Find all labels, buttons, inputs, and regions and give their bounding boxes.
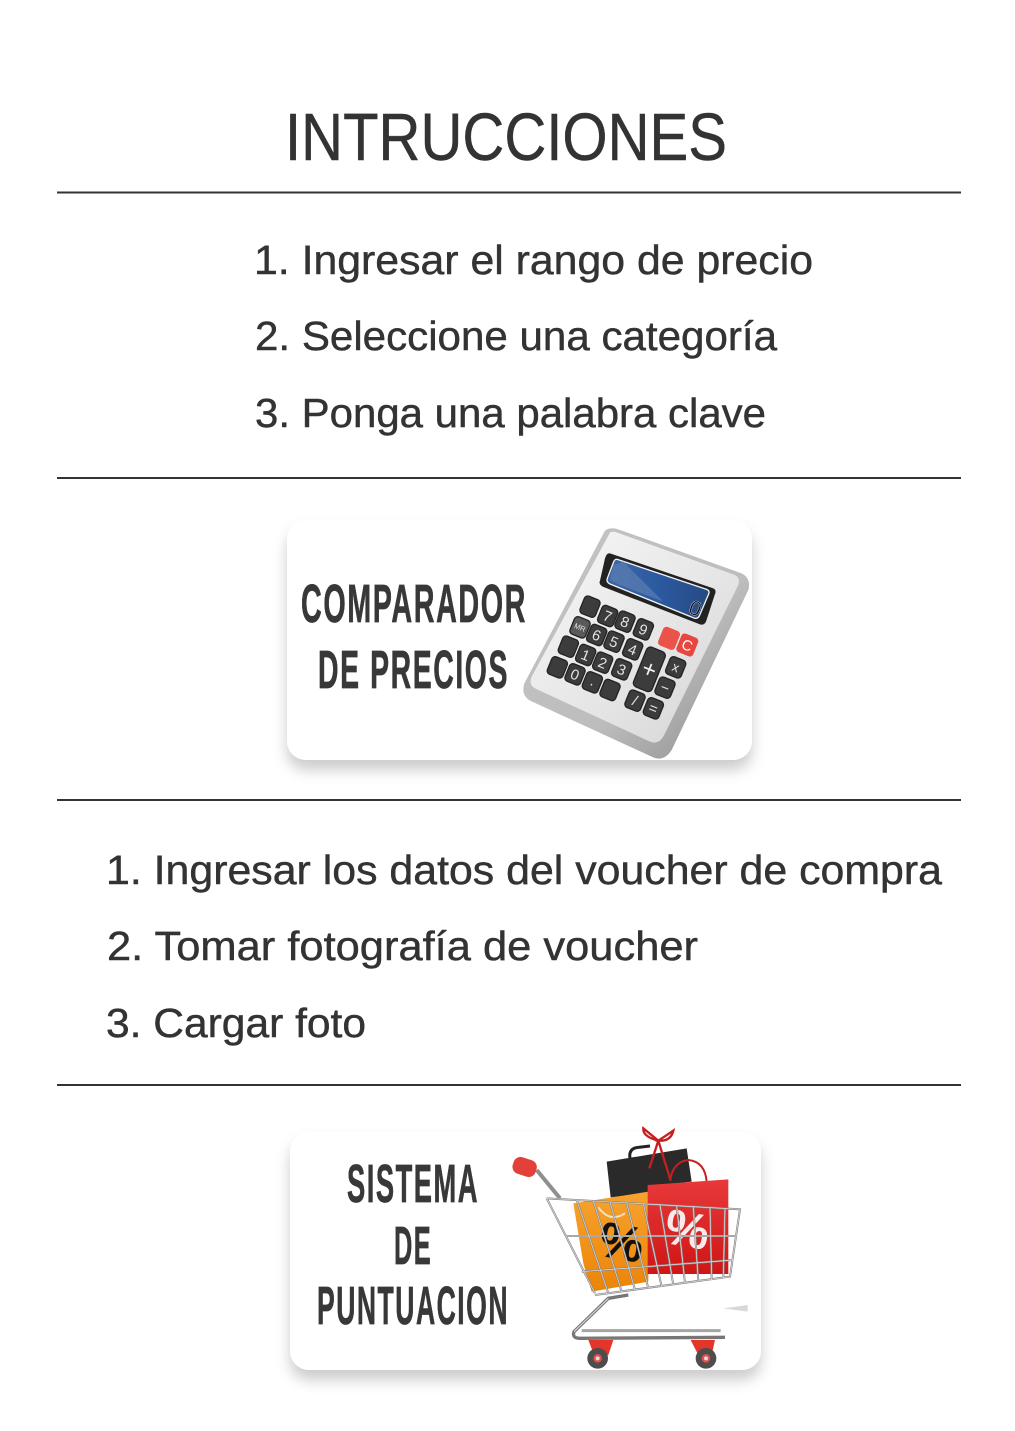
step 2: 2. Tomar fotografía de voucher: [107, 923, 698, 969]
panel: comparador de precios: [287, 520, 752, 760]
icon: calculator: 1: [578, 647, 592, 665]
heading: sistema de puntuacion: SISTEMA: [347, 1154, 479, 1214]
price comparator instructions: [254, 237, 813, 436]
step 1: 1. Ingresar el rango de precio: [254, 237, 813, 283]
icon: shopping cart: %: [595, 1211, 648, 1274]
icon: calculator: MR: [573, 621, 587, 634]
heading: comparador de precios: [301, 574, 527, 700]
icon: calculator: 9: [636, 622, 650, 640]
icon: calculator: x: [670, 659, 682, 676]
heading: comparador de precios: COMPARADOR: [301, 574, 527, 634]
icon: calculator: C: [679, 637, 695, 656]
step 3: 3. Cargar foto: [106, 1000, 366, 1046]
icon: calculator: 4: [625, 642, 639, 660]
icon: calculator: 2: [595, 655, 609, 673]
icon: calculator: =: [646, 700, 660, 718]
heading: comparador de precios: DE PRECIOS: [318, 640, 509, 700]
icon: shopping cart: [511, 1128, 748, 1369]
icon: calculator: 0: [685, 596, 705, 622]
icon: calculator: .: [588, 674, 597, 690]
icon: calculator: +: [638, 655, 661, 685]
heading: sistema de puntuacion: [317, 1154, 509, 1336]
heading: sistema de puntuacion: DE: [394, 1216, 432, 1276]
icon: shopping cart: %: [661, 1198, 714, 1261]
icon: calculator: 3: [614, 662, 628, 680]
panel: sistema de puntuacion: PUNTUACION: [317, 1276, 509, 1336]
step 3: 3. Ponga una palabra clave: [255, 390, 766, 436]
icon: calculator: 8: [618, 614, 631, 632]
icon: calculator: 5: [607, 634, 620, 652]
icon: calculator: /: [630, 693, 640, 710]
step 1: 1. Ingresar los datos del voucher de compra: [106, 847, 942, 893]
panel: sistema de puntuacion: [290, 1128, 761, 1370]
title: INTRUCCIONES: [285, 100, 727, 175]
icon: calculator: −: [658, 680, 672, 698]
icon: calculator: 7: [600, 608, 614, 626]
icon: calculator: 6: [589, 627, 603, 645]
icon: calculator: 0: [568, 667, 581, 685]
icon: calculator: [523, 528, 749, 759]
voucher instructions: [106, 847, 942, 1046]
step 2: 2. Seleccione una categoría: [255, 313, 777, 359]
